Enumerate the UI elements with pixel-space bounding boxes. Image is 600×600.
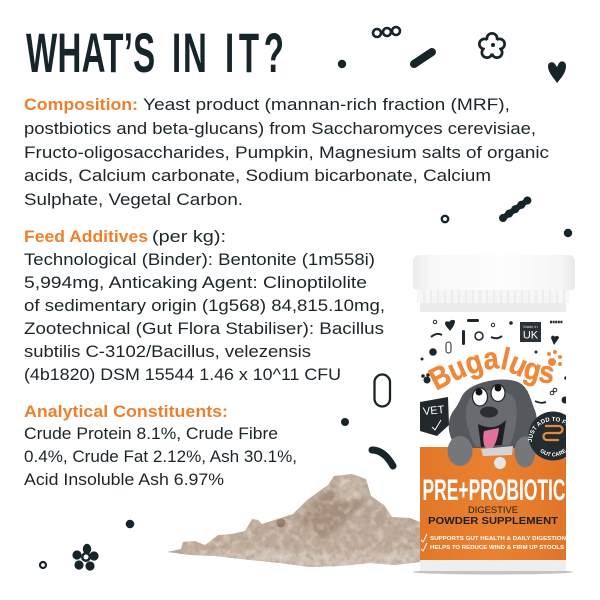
text block: composition: Fructo-oligosaccharides, Pumpkin, Magnesium salts of organic	[24, 143, 550, 162]
text block: analytical constituents: Acid Insoluble Ash 6.97%	[24, 470, 224, 489]
made in UK badge: Made in	[523, 324, 538, 329]
text block: composition: postbiotics and beta-glucans) from Saccharomyces cerevisiae,	[24, 119, 536, 138]
vet badge	[420, 397, 449, 436]
jar shadow	[413, 570, 573, 574]
text block: analytical constituents: Crude Protein 8.1%, Crude Fibre	[24, 424, 278, 443]
paw icon	[547, 350, 562, 366]
text block: analytical constituents	[24, 402, 297, 489]
text block: feed additives: Zootechnical (Gut Flora Stabiliser): Bacillus	[24, 319, 384, 338]
text block: composition: Yeast product (mannan-rich fraction (MRF),	[143, 95, 510, 114]
text block: feed additives: (per kg):	[152, 227, 226, 246]
text block: composition: Composition:	[24, 95, 138, 114]
jar doodles	[420, 319, 568, 404]
text block: feed additives: of sedimentary origin (1g568) 84,815.10mg,	[24, 296, 385, 315]
made in UK badge	[520, 322, 541, 342]
brand name: Bugalugs	[428, 346, 554, 390]
product type: POWDER SUPPLEMENT	[428, 515, 559, 527]
text block: analytical constituents: 0.4%, Crude Fat 2.12%, Ash 30.1%,	[24, 447, 297, 466]
gut care badge: JUST ADD TO FOOD	[528, 416, 566, 442]
text block: feed additives: Feed Additives	[24, 227, 148, 246]
text block: feed additives: (4b1820) DSM 15544 1.46 x 10^11 CFU	[24, 365, 341, 384]
gut care badge	[528, 412, 566, 460]
text block: composition	[24, 95, 550, 209]
text block: composition: Sulphate, Vegetal Carbon.	[24, 190, 243, 209]
jar body	[420, 303, 566, 571]
product type: DIGESTIVE	[468, 505, 518, 516]
title: IN	[172, 21, 207, 84]
text block: feed additives: subtilis C-3102/Bacillus, velezensis	[24, 342, 311, 361]
title	[26, 21, 284, 84]
text block: composition: acids, Calcium carbonate, Sodium bicarbonate, Calcium	[24, 166, 491, 185]
text block: analytical constituents: Analytical Constituents:	[24, 402, 228, 421]
powder pile	[167, 474, 420, 567]
product type	[428, 506, 558, 524]
gut care badge: GUT CARE	[540, 448, 566, 456]
text block: feed additives: 5,994mg, Anticaking Agent: Clinoptilolite	[24, 273, 367, 292]
text block: feed additives: Technological (Binder): Bentonite (1m558i)	[24, 250, 375, 269]
text block: feed additives	[24, 227, 385, 384]
made in UK badge: UK	[523, 330, 539, 342]
product benefits: HELPS TO REDUCE WIND & FIRM UP STOOLS	[430, 545, 564, 551]
product jar	[413, 255, 575, 574]
dog illustration	[448, 380, 537, 469]
title: IT?	[225, 21, 284, 84]
jar lid	[413, 255, 575, 303]
product benefits: SUPPORTS GUT HEALTH & DAILY DIGESTION	[430, 536, 566, 542]
vet badge: VET	[422, 404, 445, 418]
product benefits	[421, 534, 566, 551]
title: WHAT’S	[26, 21, 155, 84]
